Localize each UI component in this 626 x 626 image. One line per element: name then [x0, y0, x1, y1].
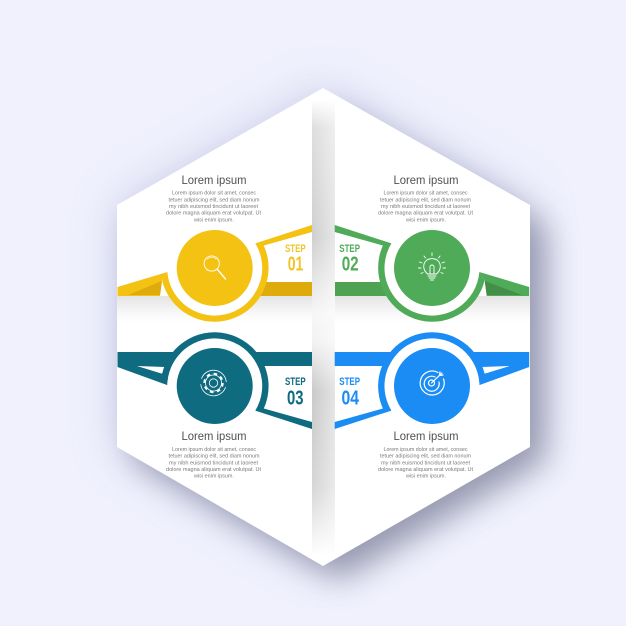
- body text: Lorem ipsum dolor sit amet, consec: [172, 191, 256, 197]
- body text: dolore magna aliquam erat volutpat. Ut: [166, 211, 261, 217]
- body text: tetuer adipiscing elit, sed diam nonum: [168, 454, 260, 460]
- ring: [335, 332, 485, 429]
- wedge shade: [128, 281, 162, 295]
- step label: STEP: [339, 376, 360, 388]
- step 1 yellow: [118, 173, 312, 322]
- circle: [394, 230, 470, 306]
- ring: [162, 225, 312, 322]
- body text: dolore magna aliquam erat volutpat. Ut: [378, 211, 473, 217]
- body text: [166, 191, 261, 223]
- wedge shade: [485, 281, 522, 295]
- icon: light bulb: [418, 253, 446, 280]
- body text: [166, 447, 261, 480]
- centre gutter shadow: [312, 100, 335, 556]
- body text: Lorem ipsum dolor sit amet, consec: [384, 447, 468, 453]
- step 2 green: [335, 173, 529, 322]
- body text: wisi enim ipsum.: [405, 217, 446, 223]
- body text: my nibh euismod tincidunt ut laoreet: [169, 204, 259, 210]
- right wedge: [479, 272, 529, 296]
- step label: STEP: [285, 243, 306, 255]
- body text: wisi enim ipsum.: [193, 474, 234, 480]
- body text: Lorem ipsum dolor sit amet, consec: [384, 191, 468, 197]
- circle: [394, 348, 470, 424]
- step number: 02: [342, 253, 359, 276]
- body text: dolore magna aliquam erat volutpat. Ut: [166, 467, 261, 473]
- horizontal shadow under top steps: [117, 296, 530, 328]
- body text: my nibh euismod tincidunt ut laoreet: [381, 204, 471, 210]
- body text: [378, 191, 473, 223]
- step 3 teal: [118, 332, 312, 480]
- step number: 03: [287, 386, 304, 409]
- step label: STEP: [285, 376, 306, 388]
- body text: wisi enim ipsum.: [405, 474, 446, 480]
- circle: [177, 230, 253, 306]
- ring: [335, 225, 485, 322]
- white disc: [384, 220, 480, 316]
- body text: wisi enim ipsum.: [193, 217, 234, 223]
- body text: dolore magna aliquam erat volutpat. Ut: [378, 467, 473, 473]
- band: [335, 352, 529, 385]
- left wedge: [118, 272, 167, 296]
- body text: Lorem ipsum dolor sit amet, consec: [172, 447, 256, 453]
- icon: gear: [197, 367, 230, 399]
- white disc: [384, 338, 480, 434]
- circle: [177, 348, 253, 424]
- step number: 01: [288, 253, 303, 276]
- step 4 blue: [335, 332, 529, 480]
- white disc: [167, 338, 262, 434]
- body text: my nibh euismod tincidunt ut laoreet: [381, 460, 471, 466]
- dark bar: [335, 282, 397, 296]
- icon: target: [420, 371, 444, 395]
- body text: tetuer adipiscing elit, sed diam nonum: [168, 197, 260, 203]
- dark bar: [250, 282, 312, 296]
- heading: Lorem ipsum: [182, 429, 247, 443]
- heading: Lorem ipsum: [182, 173, 247, 187]
- body text: tetuer adipiscing elit, sed diam nonum: [380, 454, 472, 460]
- white disc: [167, 220, 262, 316]
- hexagon drop shadow: [117, 88, 546, 580]
- body text: [378, 447, 473, 480]
- band: [118, 352, 312, 385]
- step number: 04: [342, 386, 359, 409]
- body text: tetuer adipiscing elit, sed diam nonum: [380, 197, 472, 203]
- heading: Lorem ipsum: [394, 429, 459, 443]
- ring: [162, 332, 312, 429]
- heading: Lorem ipsum: [394, 173, 459, 187]
- hexagon panel: [117, 88, 530, 566]
- body text: my nibh euismod tincidunt ut laoreet: [169, 460, 259, 466]
- icon: magnifier: [204, 256, 226, 279]
- step label: STEP: [339, 243, 360, 255]
